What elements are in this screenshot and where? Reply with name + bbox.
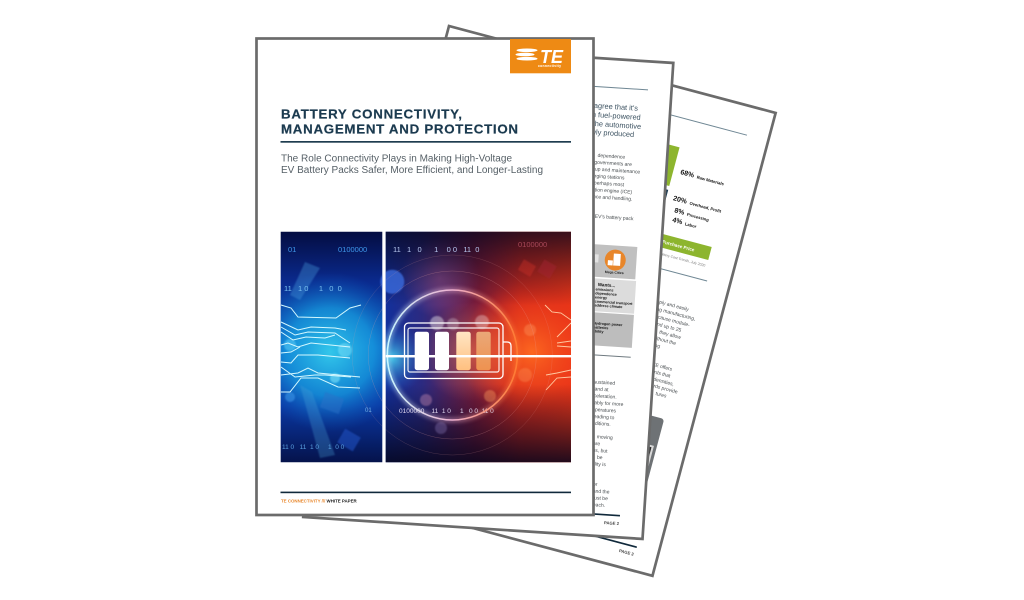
panel: consumers wants: emissions (595, 287, 614, 293)
panel: hydrogen power: Hydrogen power (593, 321, 623, 327)
chart label: 20% overhead, profit: 20% Overhead, Profit (672, 195, 723, 215)
page 2 body text, lower column: temperatures (586, 407, 617, 414)
cost chart: green and navy bars (563, 121, 680, 208)
panel: hydrogen power: batteries (593, 325, 609, 330)
page 2 body text, lower column (571, 379, 625, 510)
page 3 body text, second paragraph: boards that (645, 367, 672, 380)
panel: hydrogen power (340, 296, 634, 348)
cover page (front sheet) (256, 38, 594, 515)
battery icon (400, 323, 511, 378)
chart label: 4% labor: 4% Labor (671, 217, 698, 230)
binary digits: 11 0 11 1 0 1 0 0 (282, 444, 345, 451)
page 3 body text, first paragraph (639, 297, 698, 357)
page 3 body text, first paragraph: without the (652, 335, 677, 347)
panel: consumers wants: dependence (595, 291, 617, 297)
page 2 intro text: governments are (594, 160, 632, 168)
page 2 intro text: combustion engine (ICE) (577, 186, 633, 196)
panel: drivers row with mega cities icon (345, 228, 637, 279)
page 3 body text, first paragraph: during manufacturing, (648, 304, 696, 322)
energy ring (352, 255, 552, 455)
page 2 body text, lower column: moving (596, 434, 613, 441)
page 3 body text, first paragraph: because module- (652, 313, 691, 329)
page 3 body text, second paragraph (640, 361, 684, 402)
binary digits: 0100000 (338, 245, 367, 254)
chart label: 68% raw materials: 68% Raw Materials (680, 169, 725, 188)
hero image: battery on circuit background (280, 231, 572, 463)
page 2 body text, lower column: conditions. (587, 420, 611, 428)
binary digits: 0100000 11 1 0 1 0 0 11 0 (399, 408, 494, 415)
binary digits: 01 (288, 245, 296, 254)
footer label: TE CONNECTIVITY /// WHITE PAPER (281, 498, 358, 504)
page 3 body text, second paragraph: tures (655, 391, 668, 400)
page 3 body text, first paragraph: simply and easily (651, 297, 690, 313)
page 2 (middle sheet) (303, 41, 673, 539)
page number 3: PAGE 3 (618, 548, 635, 557)
title (281, 106, 518, 136)
page 2 heading: in the automotive (585, 118, 641, 131)
binary digits: 01 (365, 408, 372, 414)
page 3 body text, second paragraph: TE offers (652, 362, 673, 373)
page 2 body text, lower column: tions, but (587, 447, 608, 455)
page 2 heading: than fuel-powered (581, 109, 641, 122)
binary digits (282, 240, 547, 451)
TE Connectivity logo (510, 39, 571, 73)
panel: drivers row with mega cities icon: Mega Cities (605, 270, 624, 275)
chart label: 8% processing: 8% Processing (673, 207, 710, 224)
TE Connectivity logo: TE (540, 47, 564, 67)
page 2 intro text: EV's battery pack (595, 214, 634, 222)
panel: consumers wants: commercial transport (595, 300, 633, 306)
page number 2: PAGE 2 (604, 520, 620, 526)
purchase price bar (553, 206, 712, 260)
subtitle: EV Battery Packs Safer, More Efficient, and Longer-Lasting (281, 165, 543, 176)
circuit traces, right (545, 305, 571, 390)
page 2 body text, lower column: levels, and at (579, 385, 609, 393)
panel: hydrogen power: ability (593, 329, 605, 334)
binary digits: 11 1 0 1 0 0 11 0 (393, 245, 479, 254)
page 3 (back sheet) (326, 26, 776, 576)
page 2 body text, lower column: reliably for more (587, 400, 624, 408)
title: MANAGEMENT AND PROTECTION (281, 122, 518, 136)
page 2 heading: newly produced (582, 127, 634, 139)
page 2 body text, lower column: reach. (591, 502, 605, 509)
subtitle: The Role Connectivity Plays in Making High-Voltage (281, 154, 512, 164)
page 2 intro text (571, 152, 641, 223)
page 2 body text, lower column: be (597, 455, 603, 461)
page 3 body text, first paragraph: they allow (658, 329, 682, 341)
page 2 intro text: setup and maintenance (588, 166, 641, 176)
page 2 body text, lower column: are (593, 441, 601, 447)
page 2 body text, lower column: must be (590, 495, 608, 502)
page 3 body text, first paragraph: ing (653, 342, 661, 350)
decorative tiles and bokeh (284, 259, 557, 458)
page 2 heading: Most agree that it's (576, 100, 639, 113)
light beam (386, 355, 572, 357)
page 2 body text, lower column: and the (593, 489, 610, 496)
page 3 body text, second paragraph: densities, (653, 377, 675, 388)
panel: consumers wants: energy (595, 295, 608, 300)
page 2 body text, lower column: or (593, 482, 598, 488)
page 2 body text, lower column: ability is (588, 461, 606, 468)
icon: mega cities (604, 249, 626, 271)
binary digits: 11 1 0 1 0 0 (284, 284, 342, 293)
purchase price bar: Purchase Price (662, 239, 695, 253)
page 3 body text, first paragraph: and up to 25 (653, 321, 682, 334)
subtitle (281, 154, 543, 176)
page 2 heading (574, 100, 643, 139)
TE Connectivity logo: connectivity (538, 64, 561, 68)
page 2 body text, lower column: sustained (594, 379, 615, 387)
page 2 body text, lower column: acceleration. (588, 393, 617, 401)
page 2 intro text: maintenance and handling. (572, 193, 633, 203)
page 2 intro text: charging stations (587, 173, 625, 181)
title: BATTERY CONNECTIVITY, (281, 106, 462, 122)
page 2 intro text: perhaps most (594, 180, 625, 188)
chart source note: Battery Cost Trends, July 2020 (659, 252, 706, 268)
panel: consumers wants: address climate (594, 303, 622, 309)
panel: consumers wants (343, 262, 636, 314)
page 2 body text, lower column: leading to (593, 414, 615, 421)
binary digits: 0100000 (518, 240, 547, 249)
icon: device module (580, 401, 664, 485)
panel: consumers wants: Wants... (598, 282, 615, 288)
page 2 intro text: dependence (597, 153, 625, 161)
page 3 body text, second paragraph: boards provide (645, 381, 678, 396)
circuit traces, left (281, 305, 361, 392)
